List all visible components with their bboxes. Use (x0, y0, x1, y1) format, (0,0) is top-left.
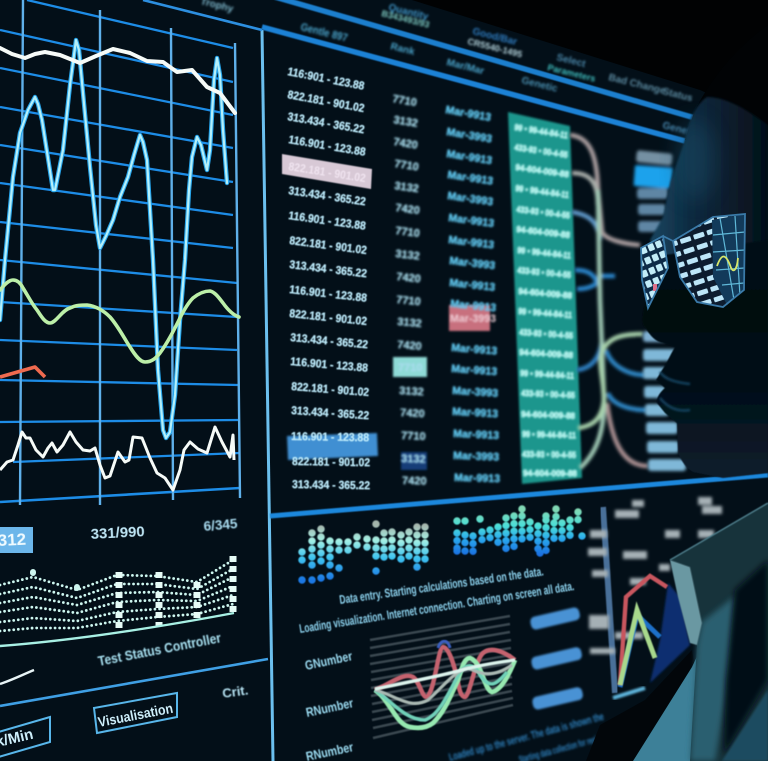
table column 1: ranges: 822.181 - 901.02 (292, 456, 370, 469)
lower right shirt (722, 690, 768, 761)
lower panel row labels: RNumber (305, 695, 355, 720)
table column 1: ranges: 822.181 - 901.02 (286, 89, 365, 115)
table header labels (199, 0, 694, 138)
teal column rows: 94-604-009-88 (518, 286, 572, 301)
dark collar area (670, 503, 768, 761)
white jagged line (0, 427, 234, 490)
teal column rows: 94-604-009-88 (521, 409, 575, 421)
table column 2: codes: 7710 (391, 93, 418, 109)
table column 2: codes: 3132 (393, 114, 419, 130)
lower panel value pills (529, 607, 584, 710)
lower panel: dot column chart 1 (302, 524, 425, 581)
status line: loading: Loading visualization. Internet connection. Charting on screen all data. (298, 579, 575, 636)
table column 2: codes: 7420 (396, 271, 421, 286)
left lens (641, 236, 668, 308)
table header labels: Status (661, 86, 694, 104)
table column 2: codes: 3132 (395, 248, 420, 263)
dark blue interior (650, 583, 690, 683)
reflective sunglasses (641, 214, 745, 308)
table column 1: ranges: 822.181 - 901.02 (288, 161, 366, 185)
table column 1: ranges: 116.901 - 123.88 (291, 431, 370, 444)
lower panel: multi-line chart (370, 616, 515, 738)
glasses frame (641, 214, 745, 308)
teal column rows: 433-93 • 00-4-55 (516, 204, 571, 221)
teal data column (508, 112, 582, 484)
teal column rows: 433-93 • 00-4-55 (519, 327, 573, 341)
table column 2: codes (391, 93, 427, 488)
teal column rows: 99 • 99-44-84-11 (522, 429, 576, 440)
forehead glow (675, 120, 715, 200)
table column 1: ranges: 116:901 - 123.88 (286, 66, 366, 93)
teal column rows: 99 • 99-44-84-11 (517, 245, 572, 261)
vertical axis (603, 507, 615, 693)
table column 3: dates: Mar-9913 (446, 148, 493, 167)
table column 1: ranges: 822.181 - 901.02 (289, 308, 368, 328)
teal column rows (514, 122, 577, 478)
axis labels (588, 497, 722, 654)
table column 2: codes: 7420 (395, 202, 420, 217)
base bar (613, 688, 645, 698)
table header labels: Select (555, 52, 587, 70)
right label column (634, 150, 686, 471)
table header labels: Bad Change (607, 72, 667, 97)
table column 1: ranges (286, 66, 370, 492)
collar flap (670, 560, 702, 645)
white upper line (0, 48, 235, 113)
table column 3: dates: Mar-3993 (452, 385, 498, 400)
green series (375, 658, 515, 728)
pink reflection dot (653, 284, 657, 291)
caption: Test Status Controller: Test Status Controller (97, 629, 223, 669)
dotted band chart (0, 556, 234, 646)
teal column rows: 99 • 99-44-84-11 (514, 122, 569, 140)
table column 1: ranges: 116.901 - 123.88 (289, 284, 368, 305)
table header labels: CR5540-1495 (467, 36, 523, 59)
table column 3: dates: Mar-3993 (453, 450, 499, 464)
table column 1: ranges: 822.181 - 901.02 (289, 235, 368, 257)
status line: data entry: Data entry. Starting calculations based on the data. (338, 564, 544, 607)
teal column rows: 94-604-009-88 (523, 468, 577, 478)
table column 1: ranges: 313.434 - 365.22 (291, 405, 369, 422)
table column 3: dates: Mar-9913 (451, 342, 498, 358)
red series (620, 576, 667, 685)
chart grid bands (370, 616, 513, 738)
stat: 331/990: 331/990 (90, 523, 145, 543)
table column 3: dates: Mar-9913 (449, 277, 496, 294)
dark room above the screen (412, 0, 768, 120)
teal stripe on left lens (644, 248, 648, 303)
table column 3: dates: Mar-9913 (451, 363, 498, 378)
hair (685, 25, 768, 140)
upper face (650, 97, 768, 330)
person: shirt and jacket (586, 503, 768, 761)
table column 2: codes: 3132 (394, 180, 419, 195)
label: Crit.: Crit. (221, 682, 249, 701)
table column 1: ranges: 116.901 - 123.88 (288, 210, 367, 233)
lower panel status text (298, 564, 575, 636)
table column 2: codes: 7420 (397, 339, 422, 353)
table column 3: dates: Mar-3993 (449, 255, 496, 272)
teal column rows: 94-604-009-88 (516, 224, 571, 240)
table column 2: codes: 7710 (396, 294, 421, 308)
white trend series (375, 660, 515, 689)
table column 1: ranges: 313.434 - 365.22 (286, 111, 365, 136)
table header labels: Mar/Mar (445, 57, 485, 77)
table column 2 blue highlight (401, 452, 427, 470)
table column 3: dates: Mar-3993 (450, 313, 496, 325)
black jacket (586, 650, 695, 761)
table header labels: Rank (389, 41, 416, 58)
table column 3: dates: Mar-9913 (452, 406, 498, 420)
table column 3: dates: Mar-9913 (444, 104, 492, 124)
small white trend stroke (0, 670, 34, 684)
teal column rows: 433-93 • 00-4-55 (522, 449, 576, 460)
reflected graph grid (713, 216, 745, 300)
shirt front left (633, 650, 700, 761)
cyan oscillating line (0, 40, 227, 438)
shirt front placket (690, 596, 735, 761)
orange line (0, 367, 45, 377)
button: k/Min (0, 717, 50, 758)
table header labels: Genetic (520, 75, 559, 95)
table column 2: codes: 7420 (400, 407, 425, 420)
teal column rows: 433-93 • 00-4-55 (517, 265, 572, 280)
teal column rows: 433-93 • 00-4-55 (514, 142, 569, 160)
reflected graph panel (712, 214, 745, 305)
collar rim (670, 503, 768, 560)
lower face (642, 240, 768, 478)
table column 1: ranges: 822.181 - 901.02 (291, 381, 369, 399)
lower panel: dot column chart 2 (457, 509, 582, 554)
lip highlight (660, 372, 690, 410)
table column 2: codes: 7710 (395, 225, 420, 240)
lower panel row labels: GNumber (304, 648, 354, 673)
highlighted row: blue (287, 433, 378, 460)
table column 3: dates: Mar-3993 (446, 126, 493, 146)
highlighted row: pale pink (282, 154, 372, 189)
table header labels: B343493/93 (381, 8, 431, 30)
table header labels: Parameters (547, 62, 597, 84)
table column 1: ranges: 116.901 - 123.88 (290, 356, 369, 375)
teal column rows: 94-604-009-88 (515, 162, 570, 179)
chart grid (0, 0, 240, 502)
table column 3 pink highlight (449, 305, 490, 331)
right lens (673, 214, 745, 307)
table column 3: dates: Mar-9913 (448, 234, 495, 252)
table header labels: Good/Bar (471, 26, 518, 48)
table column 2: codes: 3132 (399, 385, 424, 398)
teal column rows: 433-93 • 00-4-55 (521, 388, 575, 400)
chart verticals (20, 0, 240, 505)
table column 2: codes: 3132 (397, 316, 422, 330)
table column 3: dates: Mar-9913 (448, 212, 495, 230)
yellow-green line (0, 280, 239, 362)
panel: left line chart (0, 0, 240, 505)
table column 2: codes: 7710 (394, 158, 420, 174)
button: Visualisation: Visualisation (97, 700, 174, 730)
stat: 6/345: 6/345 (203, 515, 238, 534)
table column 1 highlights (282, 154, 378, 460)
table column 3: dates (444, 104, 500, 485)
table column 1: ranges: 313.434 - 365.22 (292, 479, 370, 492)
lower panel footnote (448, 711, 608, 761)
table column 3: dates: Mar-3993 (447, 190, 494, 208)
table column 2: codes: 3132 (401, 453, 426, 466)
table header labels: Quantity (387, 2, 430, 23)
table column 1: ranges: 313.434 - 365.22 (289, 259, 368, 280)
table column 3: dates: Mar-9913 (447, 169, 494, 188)
table column 3: dates: Mar-9913 (454, 472, 500, 485)
deep shadow (724, 560, 768, 755)
flow curves linking teal column to right labels (570, 135, 648, 468)
lower panel row labels (304, 648, 355, 761)
table column 1: ranges: 313.434 - 365.22 (290, 332, 369, 351)
person: face silhouette (642, 25, 768, 478)
table column 1: ranges: 116.901 - 123.88 (288, 134, 367, 159)
teal column rows: 99 • 99-44-84-11 (515, 183, 570, 200)
teal column rows: 99 • 99-44-84-11 (518, 306, 572, 320)
teal column rows: 94-604-009-88 (519, 347, 573, 360)
table header labels: Gentle 897 (299, 21, 349, 45)
table column 2: codes: 7710 (401, 430, 426, 443)
blue series (620, 615, 660, 687)
table column 2: codes: 7710 (398, 362, 422, 374)
green series (620, 610, 655, 685)
pink series (375, 647, 515, 697)
right-hand perspective chart (588, 497, 722, 698)
stat: 312 badge (0, 527, 33, 553)
table column 2: codes: 7420 (393, 136, 419, 152)
table column 2: codes: 7420 (402, 475, 427, 488)
table column 1: ranges: 313.434 - 365.22 (288, 185, 366, 208)
teal column rows: 99 • 99-44-84-11 (520, 368, 574, 381)
table column 3: dates: Mar-9913 (450, 298, 497, 314)
table column 2 teal highlight (393, 357, 427, 377)
table header labels: Genet (661, 120, 692, 138)
blue-tipped peak (438, 641, 450, 648)
table column 3: dates: Mar-9913 (453, 428, 499, 442)
reflected yellow wave (717, 256, 738, 270)
